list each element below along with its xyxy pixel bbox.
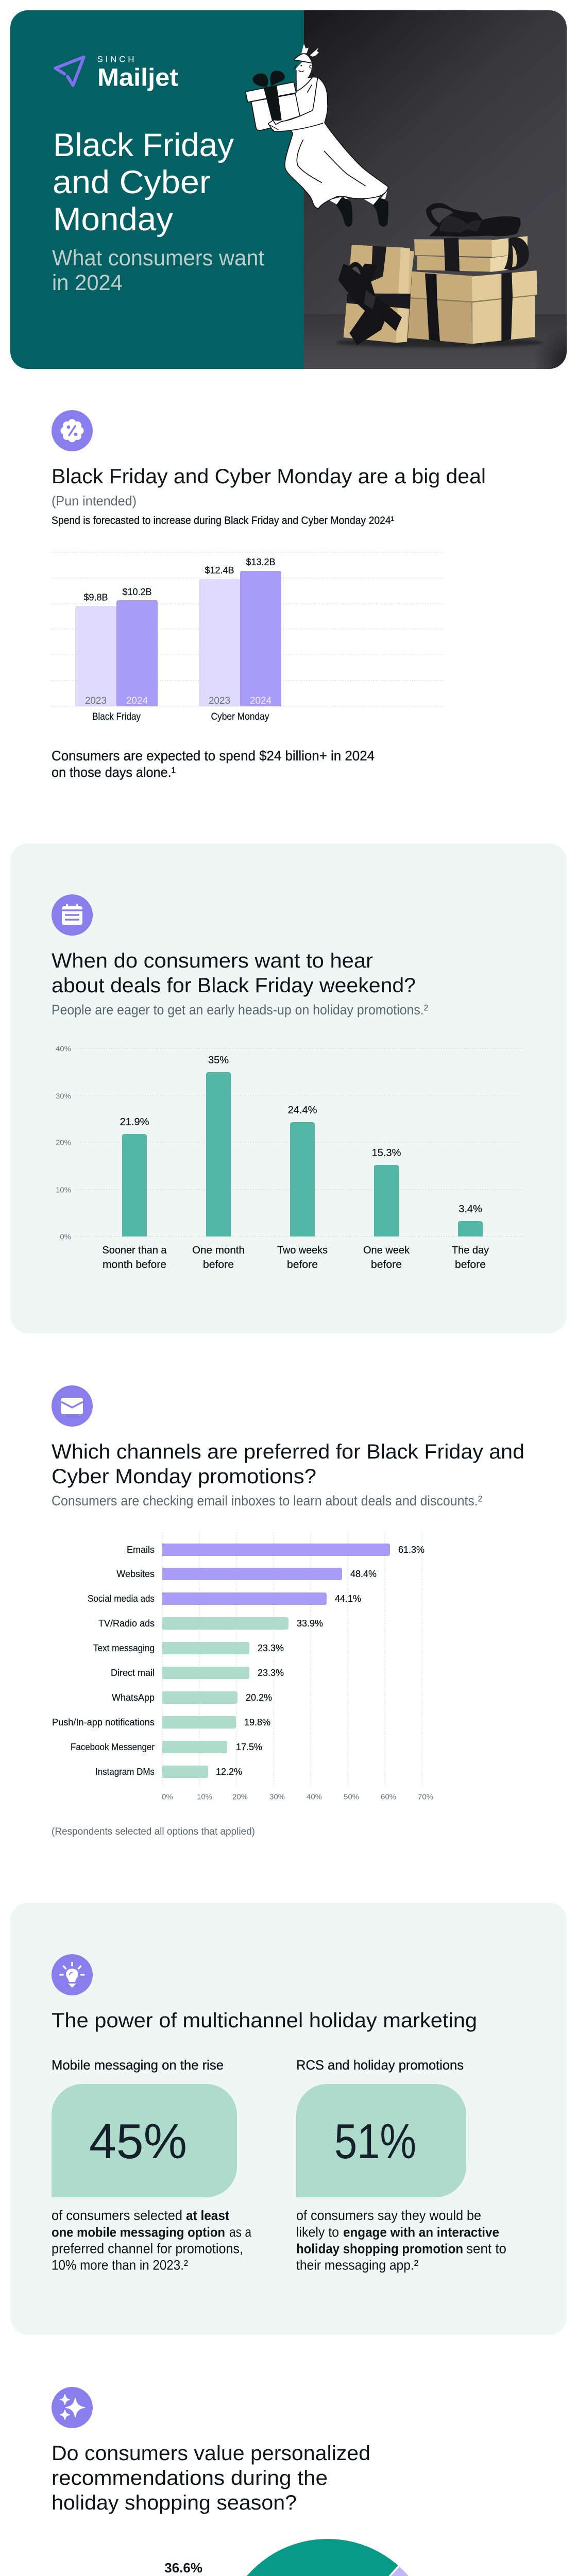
stat description [296, 2208, 506, 2273]
stat card: 45% [52, 2084, 237, 2197]
horizontal bar chart: channels [52, 1533, 433, 1801]
stat card: 45%: 45% [89, 2114, 187, 2169]
icon: sparkles [52, 2387, 93, 2428]
horizontal bar chart: channels: 60% [381, 1793, 396, 1801]
horizontal bar chart: channels: 40% [307, 1793, 322, 1801]
icon: calendar [52, 894, 93, 936]
heading: recommendations during the [52, 2467, 328, 2489]
bar chart: timing: 30% [56, 1092, 71, 1100]
heading [52, 1440, 524, 1488]
horizontal bar chart: channels: 20% [232, 1793, 248, 1801]
horizontal bar chart: channels: 23.3% [258, 1643, 284, 1653]
chart title: Spend is forecasted to increase during Black Friday and Cyber Monday 2024¹ [52, 515, 394, 527]
stat description: at least [186, 2208, 229, 2223]
bar chart: timing: 21.9% [120, 1116, 149, 1128]
heading: about deals for Black Friday weekend? [52, 974, 416, 997]
horizontal bar chart: channels: Social media ads [88, 1594, 155, 1604]
section: personalized recommendations [52, 2387, 535, 2576]
top box [414, 236, 529, 272]
horizontal bar chart: channels: 30% [269, 1793, 285, 1801]
footnote: (Respondents selected all options that applied) [52, 1826, 255, 1837]
bar chart: timing: 15.3% [372, 1147, 401, 1159]
icon: percent badge [52, 410, 93, 451]
title: Black Friday [53, 127, 234, 163]
logo: Sinch Mailjet: SINCH [97, 55, 134, 64]
heading: The power of multichannel holiday marketing [52, 2009, 477, 2032]
bar chart: spend: $9.8B [83, 592, 108, 603]
subheading: (Pun intended) [52, 493, 137, 509]
stat card: 51% [296, 2084, 466, 2197]
horizontal bar chart: channels: 33.9% [297, 1618, 323, 1629]
horizontal bar chart: channels: 61.3% [398, 1545, 425, 1555]
bar chart: timing: 10% [56, 1186, 71, 1194]
horizontal bar chart: channels: 70% [418, 1793, 433, 1801]
horizontal bar chart: channels: Emails [127, 1545, 155, 1555]
bar chart: timing: The day [452, 1245, 489, 1256]
section: Black Friday and Cyber Monday spend [52, 410, 486, 780]
title [53, 127, 234, 238]
icon: envelope [52, 1385, 93, 1427]
horizontal bar chart: channels: 48.4% [350, 1569, 377, 1579]
horizontal bar chart: channels: 23.3% [258, 1668, 284, 1678]
stat description: of consumers selected [52, 2208, 182, 2223]
left box [344, 245, 414, 343]
column: RCS promotions: RCS and holiday promotions [296, 2057, 464, 2073]
bar chart: timing: 0% [60, 1232, 71, 1242]
label: 36.6%: 36.6% [164, 2560, 202, 2575]
takeaway [52, 748, 375, 780]
horizontal bar chart: channels: 50% [344, 1793, 359, 1801]
stat description [52, 2208, 252, 2273]
bar chart: timing: 3.4% [459, 1204, 482, 1215]
bar chart: timing: before [455, 1259, 486, 1270]
heading [52, 2442, 370, 2514]
left bow [338, 262, 402, 345]
horizontal bar chart: channels: Facebook Messenger [71, 1742, 155, 1752]
bar chart: timing [56, 1045, 522, 1270]
big box [408, 270, 537, 344]
bar chart: timing: Two weeks [277, 1245, 328, 1256]
arm and hand [268, 105, 327, 131]
horizontal bar chart: channels: 17.5% [236, 1742, 262, 1752]
horizontal bar chart: channels: Websites [116, 1569, 155, 1579]
heading [52, 950, 416, 997]
stat description: holiday shopping promotion [296, 2241, 463, 2257]
horizontal bar chart: channels: Push/In-app notifications [52, 1717, 155, 1727]
panel: power of multichannel holiday marketing [10, 1903, 567, 2335]
bar chart: timing: month before [103, 1259, 166, 1270]
subtitle: in 2024 [52, 270, 123, 295]
top bow [426, 203, 521, 236]
subheading: People are eager to get an early heads-up on holiday promotions.² [52, 1002, 428, 1018]
horizontal bar chart: channels: Instagram DMs [95, 1767, 155, 1777]
bar chart: timing: 24.4% [288, 1105, 317, 1116]
column: mobile messaging: Mobile messaging on the rise [52, 2057, 224, 2073]
bar chart: spend: $13.2B [246, 557, 276, 567]
stat description: preferred channel for promotions, [52, 2241, 243, 2257]
takeaway: Consumers are expected to spend $24 billion+ in 2024 [52, 748, 375, 764]
horizontal bar chart: channels: WhatsApp [112, 1692, 155, 1703]
robe [283, 77, 388, 208]
stat description: one mobile messaging option [52, 2225, 225, 2240]
takeaway: on those days alone.¹ [52, 765, 176, 780]
section: preferred channels [52, 1385, 524, 1837]
bar chart: spend: Black Friday [92, 711, 141, 722]
illustration: winged figure carrying a gift [246, 44, 388, 226]
bar chart: timing: before [203, 1259, 234, 1270]
icon: light bulb [52, 1954, 93, 1995]
photo: gift boxes with black ribbons [336, 203, 542, 347]
hero banner [10, 10, 567, 369]
stat description: engage with an interactive [343, 2225, 499, 2240]
horizontal bar chart: channels: 12.2% [216, 1767, 242, 1777]
bar chart: timing: 35% [208, 1055, 229, 1066]
bar chart: spend: 2024 [126, 696, 148, 706]
horizontal bar chart: channels: 10% [197, 1793, 212, 1801]
bar chart: spend: 2023 [85, 696, 107, 706]
heading: Black Friday and Cyber Monday are a big deal [52, 465, 486, 488]
bar chart: timing: Sooner than a [102, 1245, 167, 1256]
horizontal bar chart: channels: Text messaging [93, 1643, 155, 1653]
horizontal bar chart: channels: TV/Radio ads [98, 1618, 155, 1629]
gift [251, 94, 300, 130]
panel: when consumers want to hear about deals [10, 843, 567, 1333]
bar chart: spend [52, 552, 444, 722]
heading: When do consumers want to hear [52, 950, 373, 972]
donut chart: personalization [205, 2522, 451, 2576]
logo: Sinch Mailjet: Mailjet [97, 64, 178, 92]
bar chart: spend: Cyber Monday [211, 711, 269, 722]
bar chart: spend: $12.4B [205, 565, 234, 575]
heading: Cyber Monday promotions? [52, 1465, 316, 1488]
bar chart: timing: 40% [56, 1045, 71, 1053]
bar chart: timing: One week [363, 1245, 410, 1256]
heading: Do consumers value personalized [52, 2442, 370, 2465]
horizontal bar chart: channels: 44.1% [335, 1594, 361, 1604]
column: RCS promotions [296, 2057, 506, 2273]
bar chart: spend: 2023 [209, 696, 230, 706]
stat description: likely to [296, 2225, 339, 2240]
feet [329, 191, 388, 226]
subtitle: What consumers want [52, 246, 264, 270]
horizontal bar chart: channels: 20.2% [246, 1692, 272, 1703]
stat description: their messaging app.² [296, 2258, 418, 2273]
heading: Which channels are preferred for Black Friday and [52, 1440, 524, 1463]
title: and Cyber [53, 164, 211, 200]
subtitle [52, 246, 264, 295]
bar chart: spend: $10.2B [122, 587, 152, 597]
bar chart: timing: before [287, 1259, 318, 1270]
bar chart: timing: before [371, 1259, 402, 1270]
helmet [294, 54, 313, 63]
stat description: of consumers say they would be [296, 2208, 481, 2223]
stat card: 51%: 51% [334, 2114, 416, 2169]
stat description: sent to [466, 2241, 506, 2257]
bar chart: timing: 20% [56, 1139, 71, 1147]
logo: Sinch Mailjet [55, 55, 178, 92]
horizontal bar chart: channels: 19.8% [244, 1717, 270, 1727]
stat description: 10% more than in 2023.² [52, 2258, 188, 2273]
beard and head [296, 62, 312, 81]
bar chart: timing: One month [192, 1245, 245, 1256]
horizontal bar chart: channels: Direct mail [111, 1668, 155, 1678]
bar chart: spend: 2024 [250, 696, 272, 706]
column: mobile messaging [52, 2057, 252, 2273]
heading: holiday shopping season? [52, 2492, 297, 2514]
subheading: Consumers are checking email inboxes to learn about deals and discounts.² [52, 1493, 482, 1509]
title: Monday [53, 201, 174, 238]
horizontal bar chart: channels: 0% [162, 1793, 173, 1801]
stat description: as a [229, 2225, 252, 2240]
